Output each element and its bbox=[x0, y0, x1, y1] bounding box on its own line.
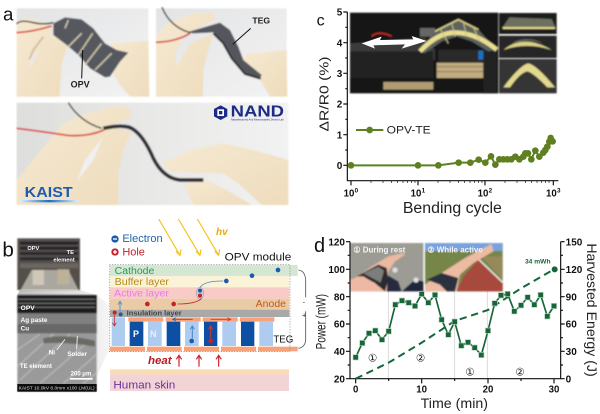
x tick labels: 10 bbox=[546, 189, 557, 200]
x tick labels bbox=[353, 384, 559, 395]
34 mWh annotation: 34 mWh bbox=[525, 259, 551, 266]
photo: TEG side bent bbox=[156, 7, 287, 97]
y tick labels: 4 bbox=[337, 38, 343, 49]
SEM cross-section image: Ni bbox=[49, 350, 55, 357]
x tick labels: 10 bbox=[411, 189, 421, 200]
panel c: bending cycle chart bbox=[316, 8, 561, 217]
light rays hv bbox=[159, 219, 220, 255]
photo: side view with logos bbox=[17, 103, 288, 205]
external circuit bracket: - bbox=[303, 297, 306, 306]
axes bbox=[346, 242, 565, 383]
panel label a: a bbox=[3, 4, 14, 25]
logo: NAND bbox=[214, 103, 284, 121]
y tick labels: 2 bbox=[337, 100, 343, 111]
left axis title: Power (mW) bbox=[314, 294, 329, 349]
SEM cross-section image: Cu bbox=[21, 326, 29, 333]
legend: hole: Hole bbox=[122, 247, 145, 259]
power data series bbox=[353, 291, 557, 360]
left tick labels: 20 bbox=[334, 374, 345, 385]
OPV layer stack: Buffer layer bbox=[115, 277, 170, 288]
panel label c: c bbox=[317, 12, 325, 29]
panel d: power and energy chart bbox=[314, 235, 599, 411]
y tick labels bbox=[337, 8, 343, 172]
left tick labels: 80 bbox=[334, 292, 345, 303]
region markers: ① bbox=[465, 366, 475, 378]
SEM overview image: element bbox=[53, 258, 75, 264]
logo: KAIST: KAIST bbox=[25, 184, 73, 201]
SEM cross-section image: Ag paste bbox=[21, 317, 48, 324]
charge carriers and paths bbox=[112, 268, 280, 343]
SEM cross-section image bbox=[17, 295, 97, 392]
SEM cross-section image: Solder bbox=[67, 351, 88, 358]
data series OPV-TE bbox=[348, 135, 556, 169]
SEM cross-section image: OPV bbox=[21, 305, 35, 312]
right tick labels: 30 bbox=[566, 347, 577, 358]
external circuit bracket: + bbox=[302, 310, 306, 319]
SEM overview image bbox=[17, 238, 80, 290]
SEM cross-section image: TE element bbox=[20, 364, 52, 370]
logo: NAND: Nanoelectronic And Neuromorphic Device Lab bbox=[231, 117, 284, 121]
y axis title: ΔR/R0 (%) bbox=[316, 56, 331, 131]
right tick labels bbox=[566, 237, 583, 385]
y tick labels: 0 bbox=[337, 161, 343, 172]
heat label and arrows bbox=[148, 355, 221, 367]
OPV layer stack: Cathode bbox=[115, 266, 155, 277]
x tick labels: 10 bbox=[416, 384, 427, 395]
inset photo during rest bbox=[350, 243, 423, 291]
inset photos of bending rig bbox=[350, 13, 557, 93]
SEM cross-section image: KAIST 10.0kV 8.0mm x100 LM(UL) bbox=[19, 385, 95, 390]
OPV module label: OPV module bbox=[225, 251, 291, 263]
photo: OPV side bent bbox=[17, 8, 149, 97]
region markers: ① bbox=[368, 353, 378, 365]
x tick labels: 0 bbox=[355, 188, 359, 195]
TEG module: P bbox=[133, 329, 139, 339]
heat label and arrows: heat bbox=[148, 355, 173, 367]
human skin: Human skin bbox=[113, 379, 175, 391]
left tick labels bbox=[328, 237, 345, 385]
panel b: microscopy images bbox=[2, 238, 109, 392]
harvested energy dashed line bbox=[356, 266, 558, 379]
left tick labels: 100 bbox=[328, 265, 345, 276]
legend: OPV-TE bbox=[387, 125, 431, 137]
region markers: ② bbox=[515, 366, 525, 378]
photo: OPV side bent: OPV bbox=[71, 80, 90, 90]
inset photo while active bbox=[425, 243, 503, 291]
magnification funnel bbox=[17, 290, 109, 377]
panel label d: d bbox=[314, 235, 325, 257]
TEG module bbox=[110, 317, 298, 351]
dotted module outline bbox=[109, 264, 290, 352]
x tick labels: 3 bbox=[557, 188, 561, 195]
x tick labels bbox=[344, 188, 561, 200]
legend: electron: Electron bbox=[122, 233, 163, 245]
left tick labels: 60 bbox=[334, 320, 345, 331]
right tick labels: 60 bbox=[566, 320, 577, 331]
x axis title: Bending cycle bbox=[403, 200, 502, 217]
x tick labels: 10 bbox=[344, 189, 354, 200]
region markers bbox=[368, 353, 525, 378]
right axis title: Harvested Energy (J) bbox=[584, 243, 599, 377]
y tick labels: 1 bbox=[337, 130, 343, 141]
TEG module: TEG bbox=[273, 334, 293, 345]
x tick labels: 2 bbox=[489, 188, 493, 195]
SEM overview image: TE bbox=[67, 250, 74, 256]
hv label: hv bbox=[216, 227, 228, 238]
inset photo during rest: ① During rest bbox=[353, 246, 406, 255]
OPV layer stack: Active layer bbox=[114, 288, 170, 299]
right tick labels: 0 bbox=[566, 374, 572, 385]
external circuit bracket bbox=[298, 270, 310, 348]
OPV layer stack: Anode bbox=[256, 299, 286, 310]
y tick labels: 3 bbox=[337, 69, 343, 80]
axes bbox=[343, 12, 558, 185]
photo: TEG side bent: TEG bbox=[252, 15, 270, 25]
right tick labels: 90 bbox=[566, 292, 577, 303]
legend: hole bbox=[111, 247, 145, 259]
legend bbox=[356, 125, 431, 137]
SEM overview image: OPV bbox=[27, 246, 40, 252]
x tick labels: 30 bbox=[549, 384, 559, 395]
x tick labels: 10 bbox=[478, 189, 488, 200]
OPV layer stack: Insulation layer bbox=[127, 311, 182, 318]
inset photo while active: ② While active bbox=[427, 246, 483, 255]
panel b: device schematic bbox=[109, 219, 310, 391]
left tick labels: 40 bbox=[334, 347, 345, 358]
right tick labels: 150 bbox=[566, 237, 583, 248]
right tick labels: 120 bbox=[566, 265, 583, 276]
y tick labels: 5 bbox=[337, 8, 343, 19]
x tick labels: 0 bbox=[353, 384, 358, 395]
panel label b: b bbox=[2, 239, 14, 262]
OPV layer stack bbox=[110, 265, 298, 318]
human skin bbox=[110, 369, 289, 391]
TEG module: N bbox=[150, 329, 156, 339]
region markers: ② bbox=[416, 353, 426, 365]
x tick labels: 1 bbox=[422, 188, 426, 195]
left tick labels: 120 bbox=[328, 237, 345, 248]
SEM cross-section image: 200 μm bbox=[71, 371, 91, 377]
dotted region lines bbox=[388, 292, 487, 379]
panel a: device photos bbox=[3, 4, 288, 205]
x tick labels: 20 bbox=[483, 384, 493, 395]
logo: NAND: NAND bbox=[231, 103, 284, 120]
x axis title: Time (min) bbox=[421, 395, 488, 411]
